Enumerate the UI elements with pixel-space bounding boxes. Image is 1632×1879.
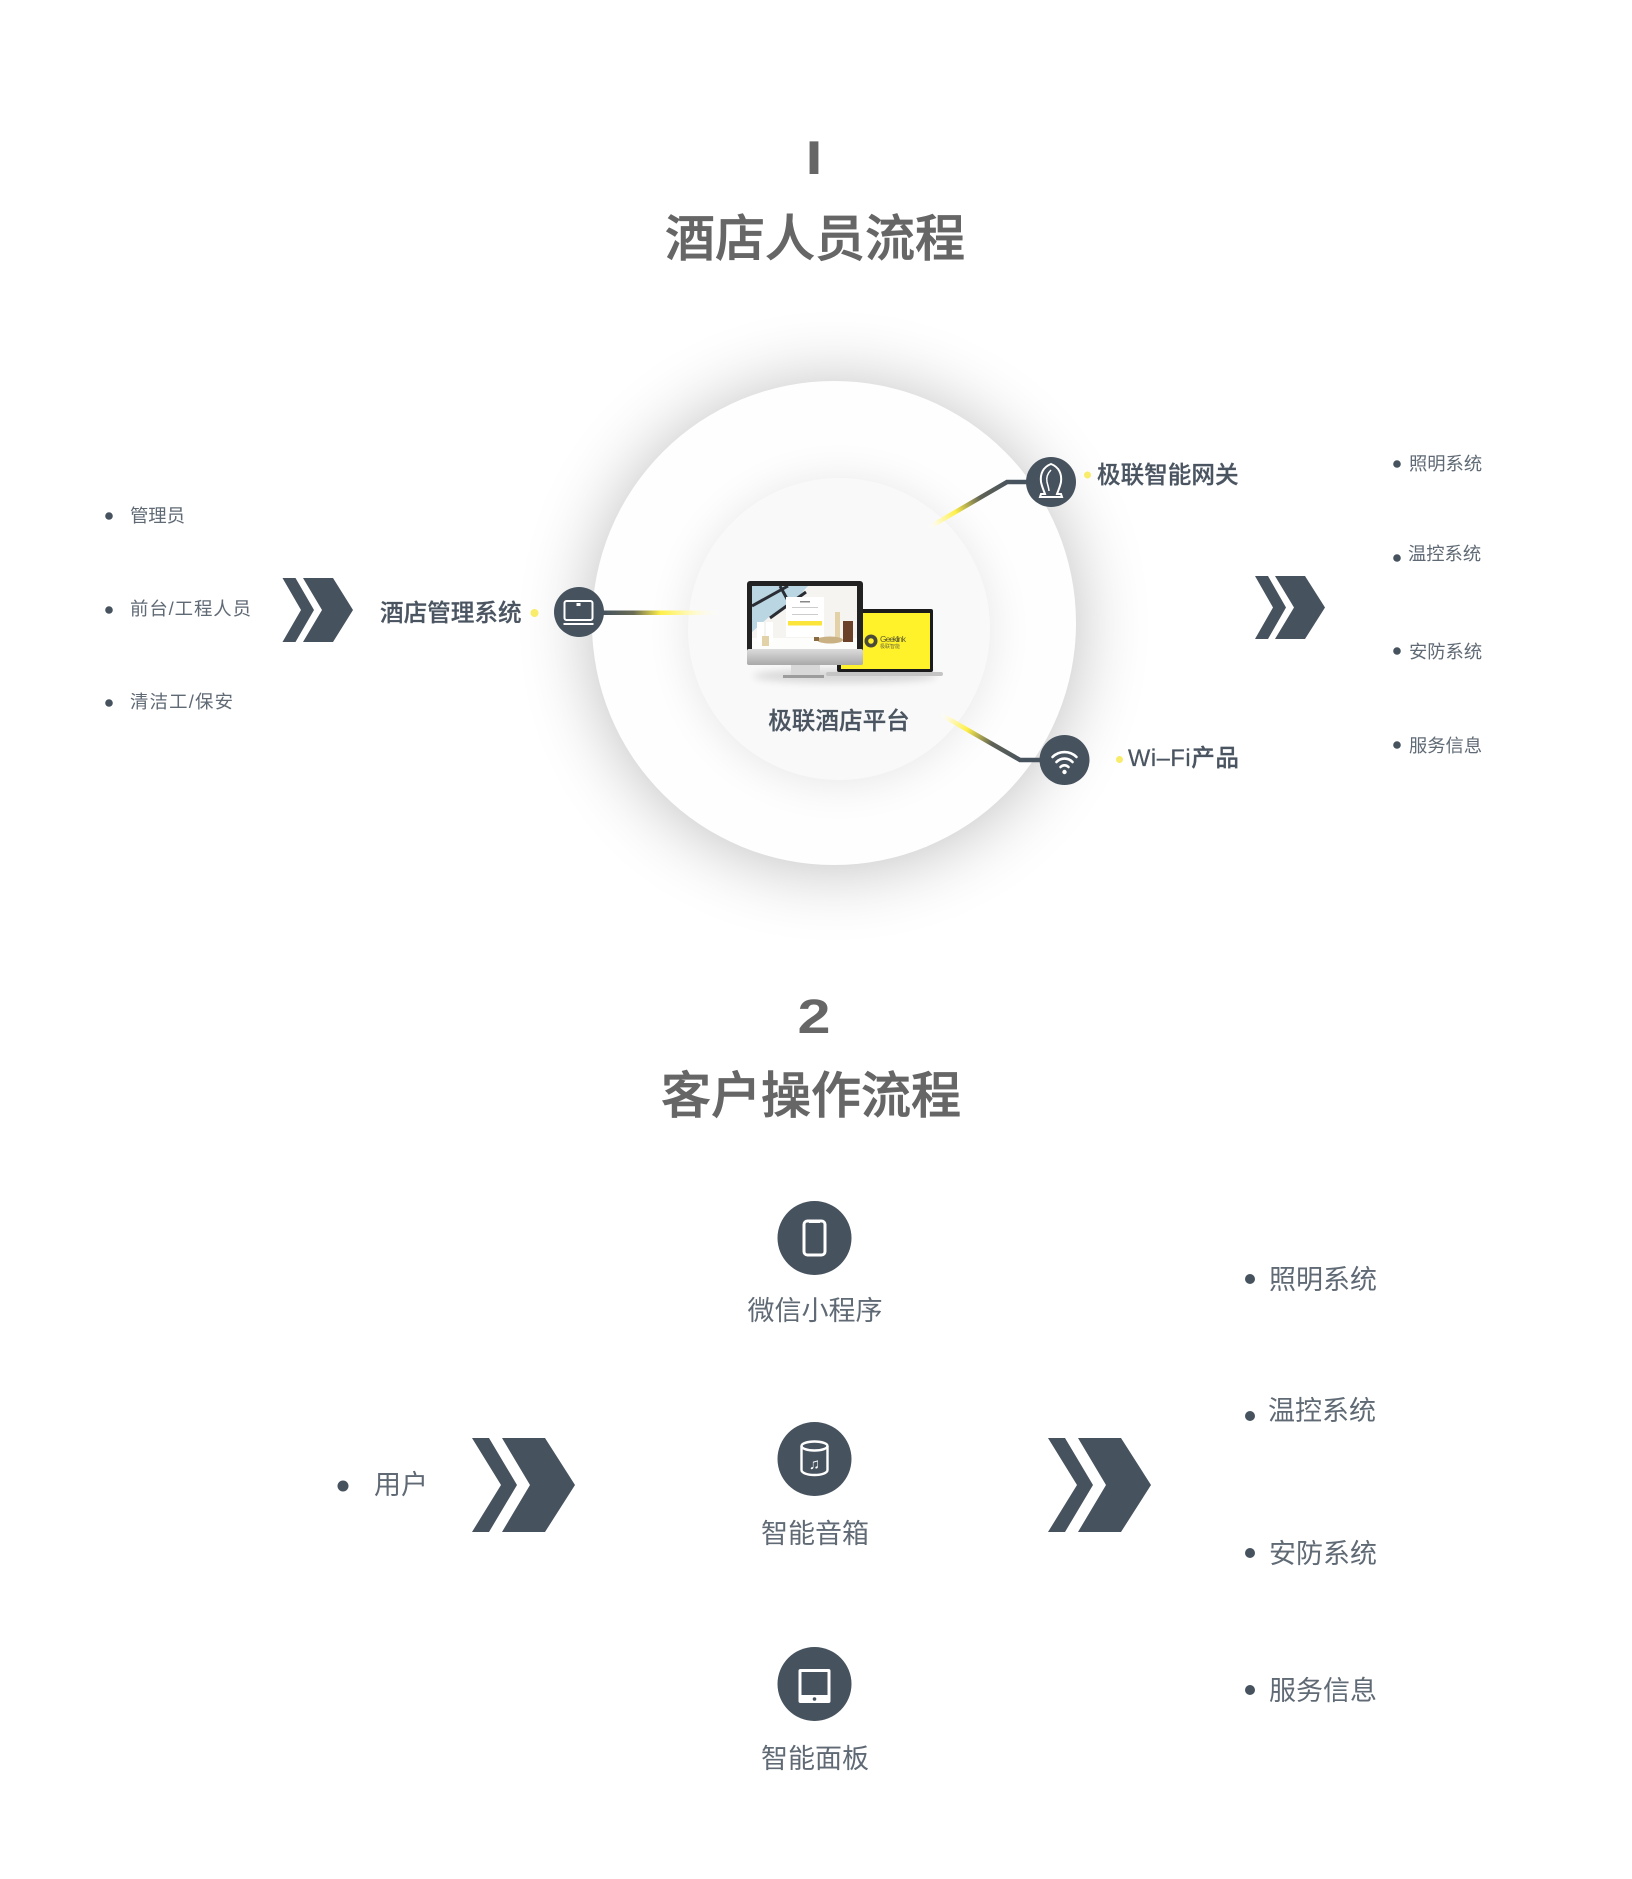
item: smart speaker: ♫ [809,1456,820,1473]
hotel management system label: 酒店管理系统 [380,600,522,627]
numeral 2: 2 [798,991,830,1044]
item: smart speaker: 智能音箱 [761,1519,869,1549]
systems list: 照明系统 [1409,453,1482,474]
staff list: 前台/工程人员 [130,598,251,619]
image: monitor and laptop: 极联智能 [880,643,900,650]
yellow dot [1116,756,1123,763]
connector: gateway [928,482,1032,528]
numeral 1: I [806,131,822,184]
item: smart speaker [761,1422,869,1549]
staff list [105,505,251,712]
icon: gateway [1026,457,1076,507]
systems list [1393,453,1482,756]
staff list: 清洁工/保安 [130,691,233,712]
arrow: staff to system [282,578,353,642]
systems list: 照明系统 [1269,1265,1377,1295]
systems list: 服务信息 [1269,1676,1377,1706]
arrow: devices to systems [1048,1438,1151,1532]
user label: 用户 [374,1470,428,1500]
systems list: 安防系统 [1269,1539,1377,1569]
panel: customer process [338,1201,1377,1774]
gateway label: 极联智能网关 [1097,462,1239,489]
item: smart panel: 智能面板 [761,1744,869,1774]
title: customer process: 客户操作流程 [661,1068,961,1124]
panel: staff process [105,381,1482,866]
systems list: 安防系统 [1409,641,1482,662]
systems list: 服务信息 [1409,735,1482,756]
wifi label: Wi–Fi产品 [1128,745,1239,772]
arrow: platform to systems [1255,576,1325,639]
item: mini program [748,1201,882,1326]
systems list [1245,1265,1377,1706]
icon: wifi [1040,735,1090,785]
platform label: 极联酒店平台 [768,708,910,735]
image: monitor and laptop [747,581,943,683]
systems list: 温控系统 [1268,1396,1376,1426]
connector: system to platform [600,610,722,615]
connector: wifi [940,714,1044,760]
systems list: 温控系统 [1408,543,1481,564]
icon: laptop [554,587,604,637]
user label [338,1470,428,1500]
yellow dot [530,609,538,617]
staff list: 管理员 [130,505,185,526]
item: smart panel [761,1647,869,1774]
item: mini program: 微信小程序 [748,1296,882,1326]
yellow dot [1084,472,1091,478]
arrow: user to devices [472,1438,575,1532]
platform rings [592,381,1076,866]
image: monitor and laptop: Geeklink [880,634,907,644]
title: hotel staff process: 酒店人员流程 [665,211,965,267]
